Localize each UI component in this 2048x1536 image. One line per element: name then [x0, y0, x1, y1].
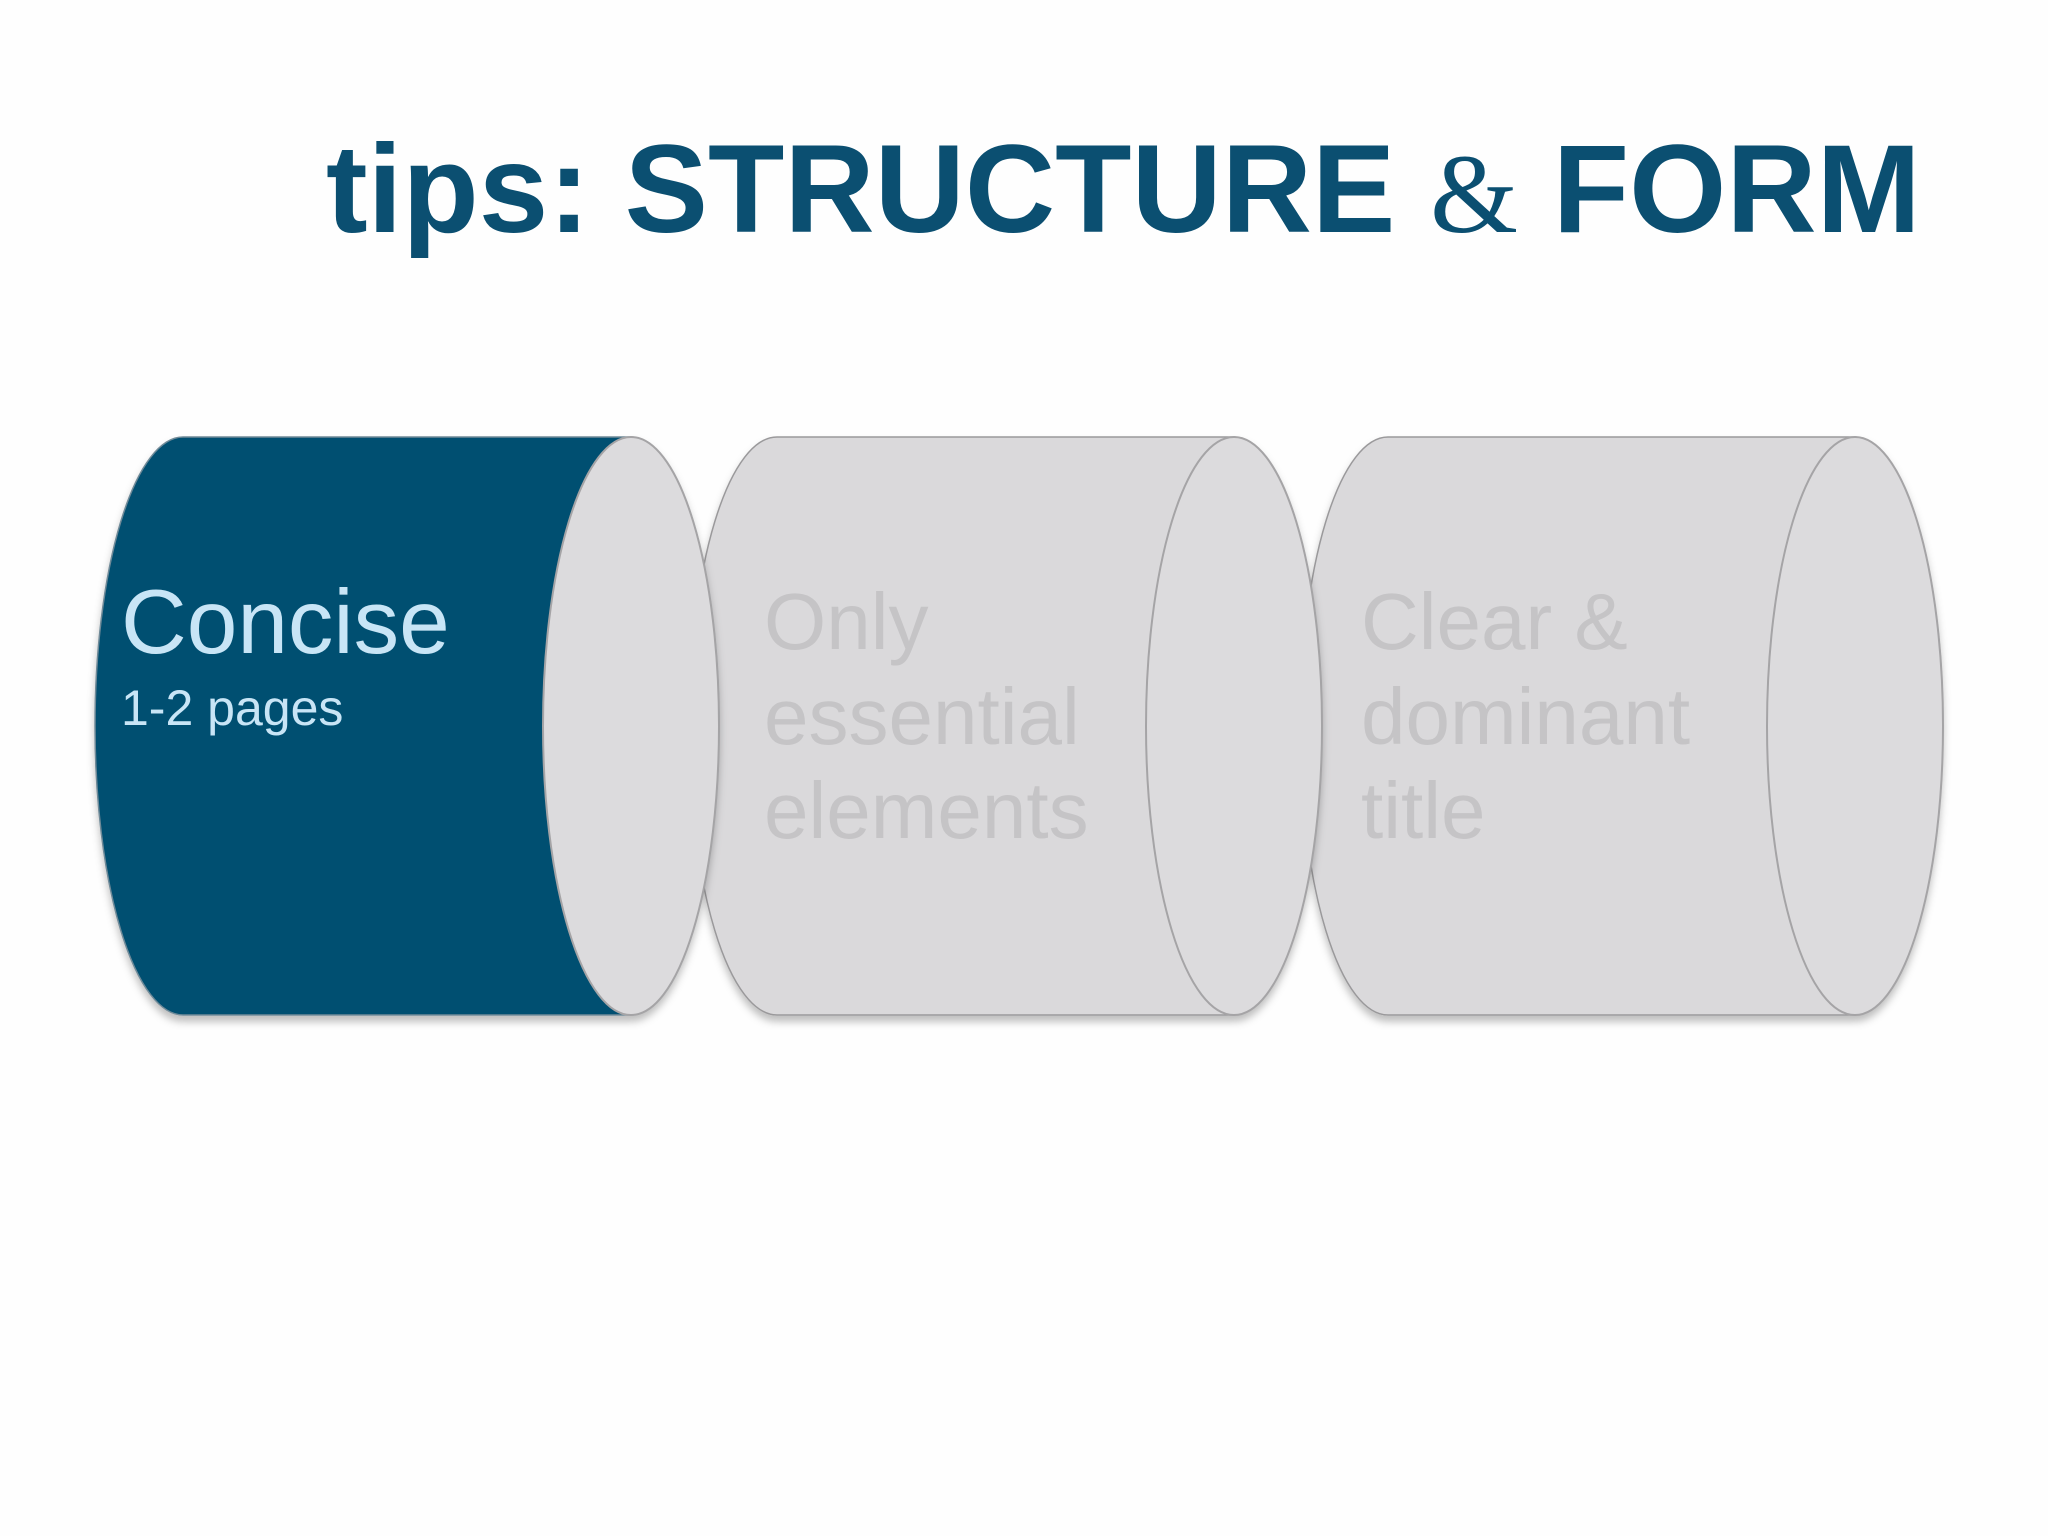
cylinder 1: concise: 1-2 pages: [121, 680, 343, 736]
cylinder 2: only essential elements: essential: [764, 672, 1080, 761]
cylinder 3: clear & dominant title: dominant: [1361, 672, 1690, 761]
cylinder 3: clear & dominant title: title: [1361, 766, 1486, 855]
title: tips: STRUCTURE & FORM: [326, 120, 1921, 259]
cylinder 2: only essential elements: Only: [764, 577, 928, 666]
cylinder 2: only essential elements: [689, 437, 1322, 1015]
cylinder 1: concise: [95, 437, 719, 1015]
cylinder 3: clear & dominant title: [1300, 437, 1943, 1015]
cylinder 2: only essential elements: elements: [764, 766, 1089, 855]
cylinder 1: concise: Concise: [121, 572, 450, 673]
cylinder 3: clear & dominant title: Clear &: [1361, 577, 1628, 666]
